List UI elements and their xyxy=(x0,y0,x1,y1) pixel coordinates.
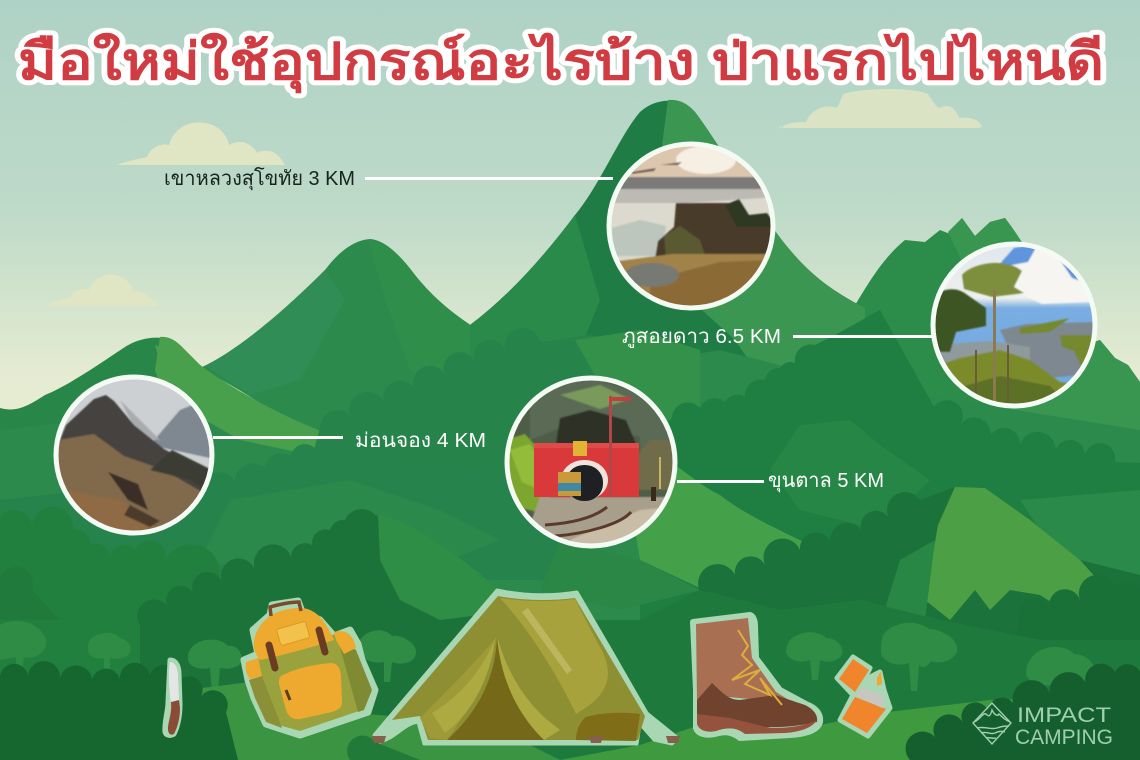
tent outline xyxy=(374,590,678,744)
backpack body xyxy=(258,634,366,731)
logo text: IMPACT xyxy=(1017,704,1111,727)
backpack front pocket xyxy=(279,663,342,719)
tent vestibule xyxy=(576,713,640,741)
photo ring xyxy=(609,144,773,308)
ridge: lit large lower right xyxy=(698,487,1140,680)
mountain: centre-left peak xyxy=(200,239,560,450)
ridge: dark forest right xyxy=(640,310,1140,620)
clouds xyxy=(47,89,982,306)
photo: red railway tunnel xyxy=(510,380,672,544)
lighter mechanism xyxy=(856,688,884,708)
photo: pine trees xyxy=(936,246,1092,404)
boot outline xyxy=(693,615,820,738)
logo: Impact Camping: CAMPING xyxy=(1015,726,1113,749)
location: ภูสอยดาว xyxy=(622,240,1100,420)
ridge: left foreground forest xyxy=(0,438,620,580)
tent opening xyxy=(447,636,544,740)
backpack straps xyxy=(269,630,325,668)
label: ภูสอยดาว 6.5 KM xyxy=(622,326,781,349)
label: เขาหลวงสุโขทัย 3 KM xyxy=(164,167,355,191)
boot lower xyxy=(697,683,817,727)
trees: silhouettes xyxy=(0,621,1094,710)
ridge: mid slope base xyxy=(0,350,1140,760)
connector line xyxy=(793,335,935,338)
ridge: centre dark wedge xyxy=(137,509,620,730)
tent side panel xyxy=(500,598,608,714)
photo: rocky peak xyxy=(58,380,210,530)
backpack top flap xyxy=(254,608,334,660)
ridge: left forest band xyxy=(0,507,260,700)
lighter outline xyxy=(837,657,890,736)
tent main xyxy=(392,596,645,740)
label: ม่อนจอง 4 KM xyxy=(355,430,486,452)
boot upper xyxy=(696,618,800,707)
ground: light green meadow xyxy=(186,682,560,760)
backpack outline xyxy=(244,601,375,735)
location: ขุนตาล xyxy=(505,376,884,552)
mountain: tall central peak xyxy=(470,101,865,480)
connector line xyxy=(677,480,764,483)
equipment: lighter xyxy=(837,657,890,736)
logo: Impact Camping xyxy=(973,703,1113,749)
tent flaps xyxy=(420,636,497,740)
connector line xyxy=(213,436,343,439)
backpack handle xyxy=(270,602,301,616)
bushes: dark front clusters xyxy=(0,661,238,760)
equipment: tent xyxy=(372,590,680,744)
label: ขุนตาล 5 KM xyxy=(768,470,884,493)
boot sole xyxy=(697,714,817,734)
mountain: left low peak xyxy=(0,338,345,520)
ridge: centre lower forest xyxy=(480,590,1140,760)
equipment: folding knife xyxy=(165,660,180,735)
photo ring xyxy=(507,378,675,546)
equipment: boot xyxy=(693,615,820,738)
photo: cliff at sunrise xyxy=(612,146,770,306)
photo ring xyxy=(933,244,1095,406)
boot laces xyxy=(732,630,782,705)
tent pegs xyxy=(372,736,680,743)
mountain: far right peak xyxy=(800,218,1140,560)
location: เขาหลวงสุโขทัย xyxy=(164,140,777,312)
equipment: backpack xyxy=(244,601,375,735)
hill: lit slope below tunnel xyxy=(630,463,824,595)
lighter lid xyxy=(839,659,869,692)
lighter base xyxy=(842,697,886,733)
location: ม่อนจอง xyxy=(55,375,486,546)
ridge: dark band centre left xyxy=(300,328,640,500)
logo mark xyxy=(973,703,1011,744)
photo ring xyxy=(56,377,212,533)
title: มือใหม่ใช้อุปกรณ์อะไรบ้าง ป่าแรกไปไหนดี xyxy=(18,32,1104,94)
connector line xyxy=(365,177,613,180)
